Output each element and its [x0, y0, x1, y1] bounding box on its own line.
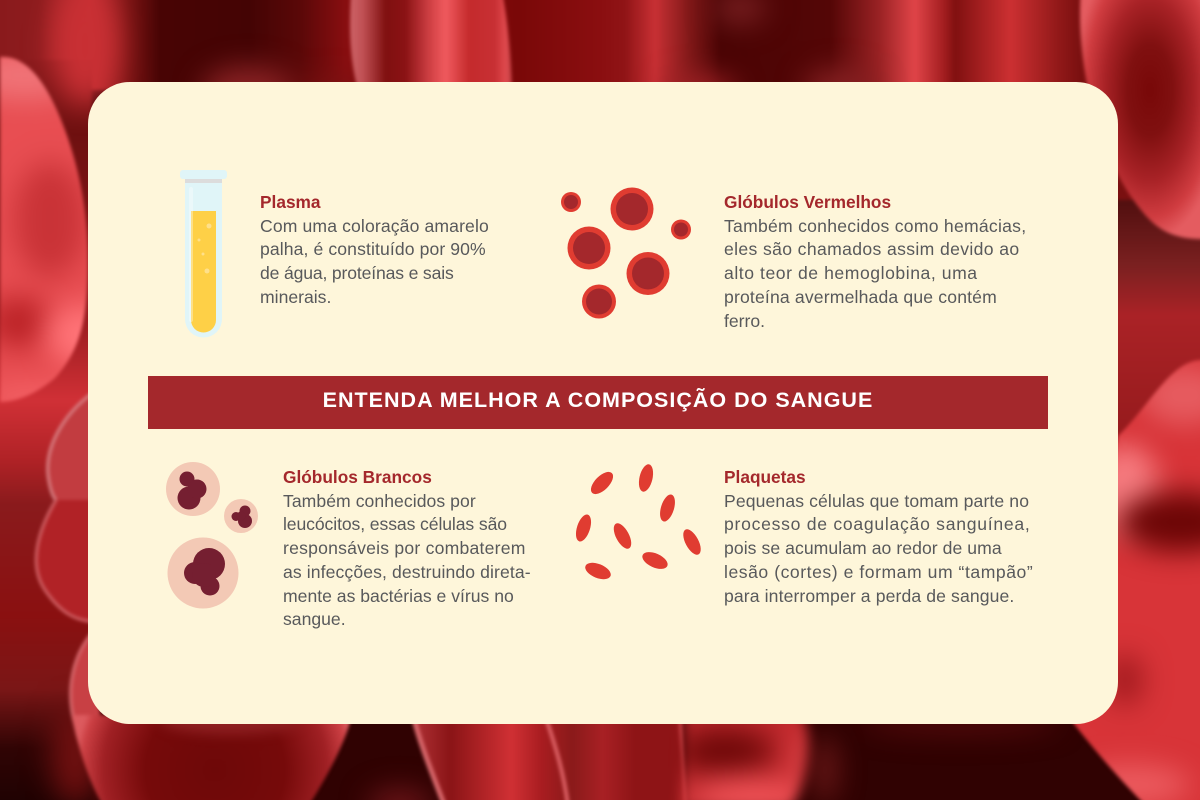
text: white blood cells: leucócitos, essas células são: [283, 514, 507, 534]
text: platelets: lesão (cortes) e formam um “tampão”: [724, 562, 1033, 582]
text: red blood cells: alto teor de hemoglobina, uma: [724, 263, 978, 283]
left large cell: [0, 54, 88, 403]
bottom centre cell: [413, 715, 686, 800]
text: plasma: palha, é constituído por 90%: [260, 239, 486, 259]
text: red blood cells: Também conhecidos como hemácias,: [724, 216, 1026, 236]
title banner: [148, 376, 1048, 429]
text: platelets: processo de coagulação sanguínea,: [724, 514, 1030, 534]
text: white blood cells: [283, 467, 531, 629]
text: white blood cells: mente as bactérias e vírus no: [283, 586, 514, 606]
text: plasma: minerais.: [260, 287, 331, 307]
cream content panel: [88, 82, 1118, 724]
icon: white blood cells: [166, 462, 258, 608]
top centre cell: [350, 0, 512, 90]
text: platelets: para interromper a perda de sangue.: [724, 586, 1014, 606]
text: white blood cells: Glóbulos Brancos: [283, 467, 432, 487]
text: white blood cells: as infecções, destruindo direta-: [283, 562, 531, 582]
title banner: ENTENDA MELHOR A COMPOSIÇÃO DO SANGUE: [323, 388, 873, 412]
text: red blood cells: [724, 192, 1026, 331]
text: red blood cells: proteína avermelhada que contém: [724, 287, 997, 307]
text: red blood cells: Glóbulos Vermelhos: [724, 192, 891, 212]
bottom left cell: [72, 715, 352, 800]
icon: red blood cells: [561, 188, 691, 318]
text: platelets: Pequenas células que tomam parte no: [724, 491, 1029, 511]
text: platelets: pois se acumulam ao redor de uma: [724, 538, 1002, 558]
text: white blood cells: responsáveis por combaterem: [283, 538, 526, 558]
icon: platelets: [576, 464, 701, 580]
bottom mid-right cell: [674, 724, 818, 800]
text: white blood cells: sangue.: [283, 609, 346, 629]
top right cell: [1080, 0, 1200, 239]
text: plasma: Plasma: [260, 192, 321, 212]
text: plasma: Com uma coloração amarelo: [260, 216, 489, 236]
text: plasma: [260, 192, 489, 307]
icon: test tube with plasma: [180, 170, 227, 338]
right large cell: [1060, 350, 1200, 800]
text: plasma: de água, proteínas e sais: [260, 263, 454, 283]
text: white blood cells: Também conhecidos por: [283, 491, 476, 511]
left lower lobes: [48, 388, 100, 510]
text: red blood cells: ferro.: [724, 311, 765, 331]
text: platelets: Plaquetas: [724, 467, 806, 487]
text: red blood cells: eles são chamados assim devido ao: [724, 239, 1020, 259]
text: platelets: [724, 467, 1033, 606]
